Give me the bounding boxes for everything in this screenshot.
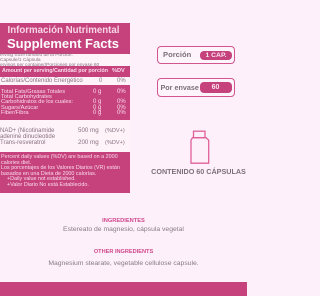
por envase box xyxy=(157,78,235,97)
footnotes: basados en una Dieta de 2000 calorías. xyxy=(1,171,96,177)
serving information: ervings per container/Porciones por envase 60 xyxy=(0,63,99,68)
serving information xyxy=(0,54,130,66)
calories row xyxy=(0,77,130,85)
nutrient percents: 0% xyxy=(117,89,126,95)
footer bar xyxy=(0,282,247,296)
nutrient labels: Total Fats/Grasas Totales xyxy=(1,89,65,95)
calories value: 0 xyxy=(99,78,102,84)
nutrient percents: 0% xyxy=(117,110,126,116)
heading: información nutricional: Información Nutrimental xyxy=(8,24,119,36)
NAD+ label: NAD+ (Nicotinamide xyxy=(0,128,55,134)
NAD+ label: Trans-resveratrol xyxy=(0,140,45,146)
resveratrol amount: 200 mg xyxy=(78,139,99,146)
serving information: erving Size/Tamaño de la Porción: xyxy=(0,53,73,58)
porción box xyxy=(157,46,235,64)
nutrient amounts: 0 g xyxy=(93,89,101,95)
nutrient amounts: 0 g xyxy=(93,105,101,111)
nutrient labels xyxy=(1,89,73,116)
footnotes: +Valor Diario No está Establecido. xyxy=(7,182,89,188)
calories percent: 0% xyxy=(117,78,126,84)
footnotes: Los porcentajes de los Valores Diarios (VR) están xyxy=(1,165,120,171)
other ingredients text: Magnesium stearate, vegetable cellulose capsule. xyxy=(48,260,199,267)
%DV header: %DV xyxy=(112,68,125,74)
other ingredients heading: OTHER INGREDIENTS xyxy=(94,249,153,255)
footnotes: +Daily value not established. xyxy=(7,176,76,182)
nutrient amounts xyxy=(93,88,101,116)
por envase value: 60 xyxy=(212,84,219,91)
nutrient percents xyxy=(117,88,126,116)
porción value xyxy=(200,50,232,60)
NAD+ amount: 500 mg xyxy=(78,127,99,134)
panel: supplement facts xyxy=(0,23,130,193)
nutrient labels: Total Carbohydrates xyxy=(1,94,52,100)
ingredients text: Estereato de magnesio, cápsula vegetal xyxy=(63,226,184,233)
resveratrol DV: (%DV+) xyxy=(105,140,125,146)
ingredients heading: INGREDIENTES xyxy=(102,218,145,224)
nutrient amounts: 0 g xyxy=(93,99,101,105)
active ingredients block xyxy=(0,120,130,152)
nutrient labels: Fiber/Fibra xyxy=(1,110,28,116)
por envase label: Por envase xyxy=(160,83,199,92)
NAD+ label xyxy=(0,128,55,146)
porción label: Porción xyxy=(163,50,191,59)
calories label: Calorías/Contenido Energético xyxy=(1,78,83,84)
por envase value xyxy=(200,82,232,93)
nutrient amounts: 0 g xyxy=(93,110,101,116)
heading: supplement facts: Supplement Facts xyxy=(7,36,119,50)
nutrient percents: 0% xyxy=(117,99,126,105)
NAD+ DV: (%DV+) xyxy=(105,128,125,134)
nutrient labels: Carbohidratos de los cuales: xyxy=(1,99,73,105)
footnotes: Percent daily values (%DV) are based on a 2000 xyxy=(1,154,118,160)
serving information: Capsule/1 Cápsula xyxy=(0,58,41,63)
table header: Amount per serving/Cantidad por porción xyxy=(2,68,108,74)
porción value: 1 CAP. xyxy=(205,52,227,58)
bottle caption: CONTENIDO 60 CÁPSULAS xyxy=(151,167,246,176)
nutrient percents: 0% xyxy=(117,105,126,111)
footnotes xyxy=(1,154,120,188)
footnotes: calories diet. xyxy=(1,160,31,166)
nutrient labels: Sugars/Azúcar xyxy=(1,105,38,111)
NAD+ label: adenine dinucleotide xyxy=(0,134,55,140)
icon: bottle xyxy=(190,130,210,164)
